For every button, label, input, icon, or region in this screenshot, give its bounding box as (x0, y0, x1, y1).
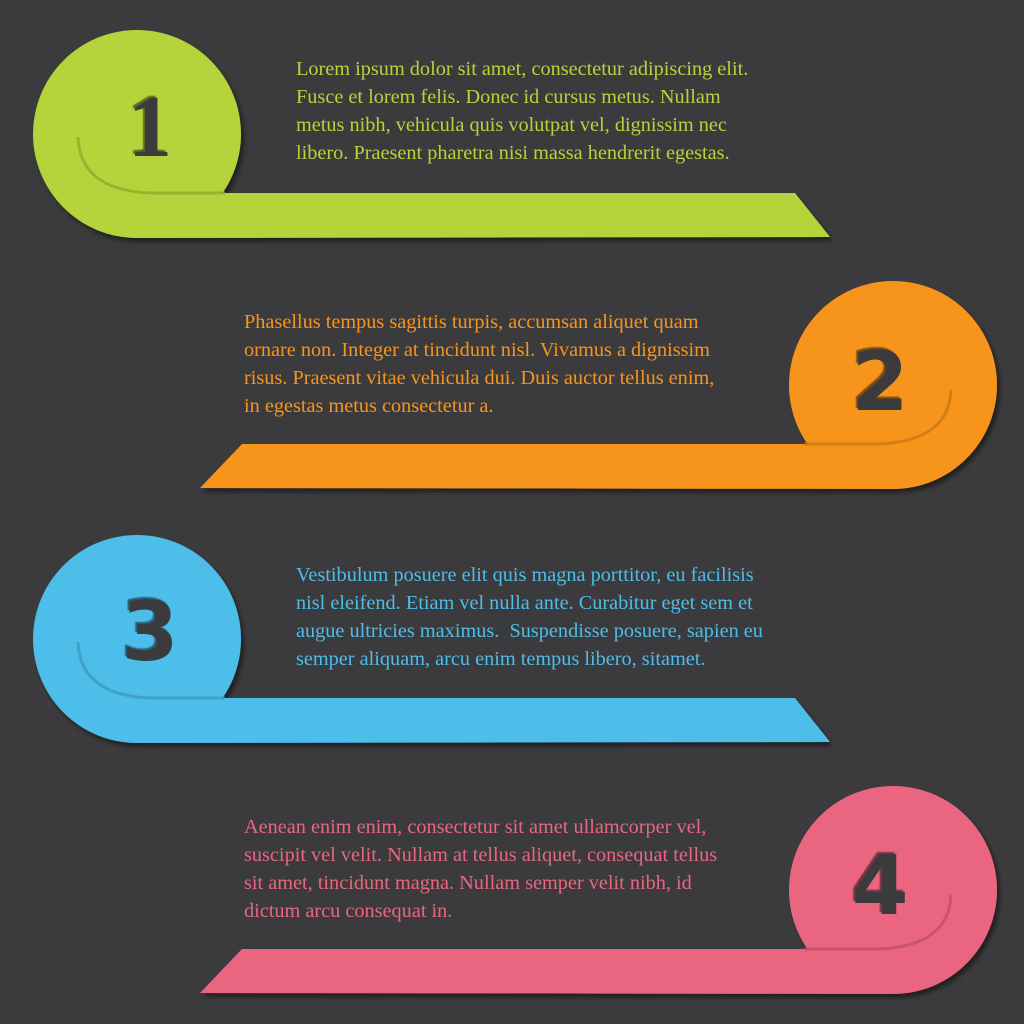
text block 2: risus. Praesent vitae vehicula dui. Duis auctor tellus enim, (244, 367, 714, 389)
shape 2: orange ribbon: 2 (851, 335, 909, 430)
text block 4: dictum arcu consequat in. (244, 900, 452, 922)
text block 4: Aenean enim enim, consectetur sit amet ullamcorper vel, (244, 816, 706, 838)
text block 2 (244, 311, 714, 417)
shape 4: pink ribbon (200, 786, 997, 994)
text block 1: Lorem ipsum dolor sit amet, consectetur adipiscing elit. (296, 58, 748, 80)
text block 3: Vestibulum posuere elit quis magna porttitor, eu facilisis (296, 564, 754, 586)
shape 1: green ribbon: 1 (128, 79, 172, 176)
text block 2: Phasellus tempus sagittis turpis, accumsan aliquet quam (244, 311, 699, 333)
text block 4: sit amet, tincidunt magna. Nullam semper velit nibh, id (244, 872, 692, 894)
text block 1: libero. Praesent pharetra nisi massa hendrerit egestas. (296, 142, 730, 164)
text block 1: Fusce et lorem felis. Donec id cursus metus. Nullam (296, 86, 721, 108)
shape 3: blue ribbon: 3 (121, 585, 179, 680)
shape 4: pink ribbon: 4 (851, 839, 909, 934)
text block 3: nisl eleifend. Etiam vel nulla ante. Curabitur eget sem et (296, 592, 753, 614)
shape 3: blue ribbon (33, 535, 830, 743)
text block 3: augue ultricies maximus. Suspendisse posuere, sapien eu (296, 620, 763, 642)
text block 2: in egestas metus consectetur a. (244, 395, 494, 417)
text block 3 (296, 564, 763, 670)
text block 1: metus nibh, vehicula quis volutpat vel, dignissim nec (296, 114, 727, 136)
text block 2: ornare non. Integer at tincidunt nisl. Vivamus a dignissim (244, 339, 710, 361)
text block 4: suscipit vel velit. Nullam at tellus aliquet, consequat tellus (244, 844, 717, 866)
shape 2: orange ribbon (200, 281, 997, 489)
text block 3: semper aliquam, arcu enim tempus libero, sitamet. (296, 648, 705, 670)
shape 1: green ribbon (33, 30, 830, 238)
text block 4 (244, 816, 717, 922)
text block 1 (296, 58, 748, 164)
